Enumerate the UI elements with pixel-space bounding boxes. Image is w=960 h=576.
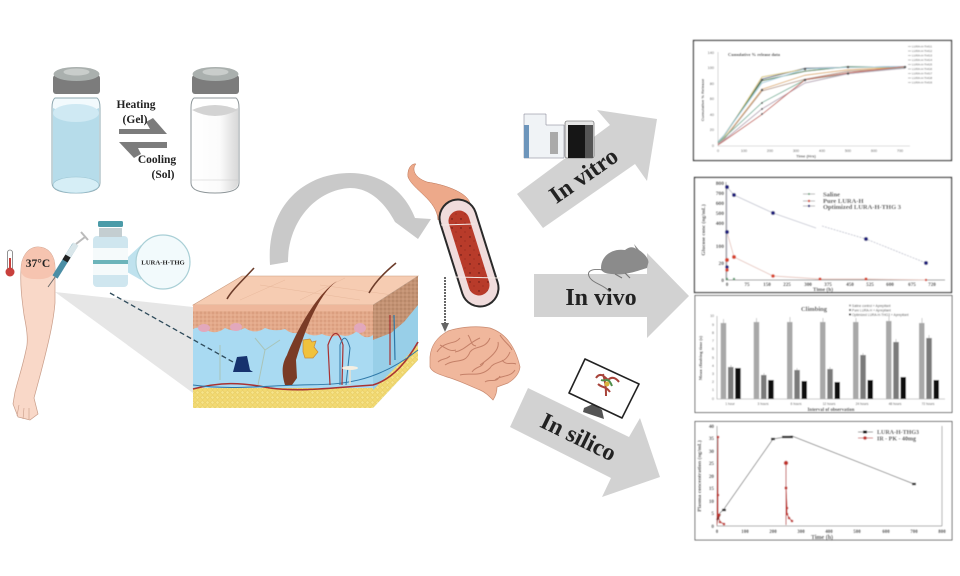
chart 3 legend: [849, 304, 909, 317]
icon: syringe: [48, 232, 88, 287]
chart 1 axes: 40: [710, 113, 714, 117]
icon: mouse: [589, 244, 648, 292]
chart 3 legend: Optimized LURA-H-THG3 + Aprepitant: [852, 313, 909, 317]
chart 1 axes: 500: [845, 149, 851, 153]
chart 3 axes: Interval of observation: [808, 408, 855, 413]
chart 1 series: [718, 66, 906, 145]
heating and cooling labels: (Gel): [123, 114, 148, 126]
heating and cooling labels: (Sol): [152, 169, 175, 181]
dashed injection line: [110, 293, 233, 362]
chart 4 axes: 30: [709, 449, 714, 455]
blue sol vial: [52, 67, 100, 193]
chart 1 legend: LURA-H-THG7: [912, 72, 932, 76]
panel: plasma concentration line chart: [695, 422, 952, 541]
panel: climbing bar chart: [695, 296, 952, 413]
chart 4 legend: IR - PK - 40mg: [877, 436, 916, 442]
sebaceous gland: [303, 339, 318, 358]
chart 2 axes: Glucose conc (ng/mL): [700, 204, 707, 256]
chart 1 legend: [908, 44, 932, 84]
chart 2 axes: 75: [744, 282, 750, 288]
chart 2 axes: 400: [716, 221, 724, 227]
chart 4 axes: 600: [882, 530, 890, 535]
icon: lab instrument: [524, 114, 594, 158]
icon: computer monitor with protein: [569, 359, 639, 419]
label: in vitro: In vitro: [545, 143, 623, 209]
chart 4 axes: 400: [825, 530, 833, 535]
chart 3 axes: 3: [712, 372, 714, 376]
skin cross-section block: [193, 263, 418, 408]
chart 1 legend: LURA-H-THG8: [912, 76, 932, 80]
chart 2 axes: 600: [886, 282, 894, 288]
chart 3 axes: 6: [712, 347, 714, 351]
chart 2 axes: 0: [721, 278, 724, 284]
chart 3 axes: 3 hours: [758, 402, 769, 406]
chart 2 axes: 20: [718, 261, 724, 267]
chart 2 axes: 100: [716, 244, 724, 250]
chart 2 series: [725, 185, 928, 281]
chart 2 axes: 375: [824, 282, 832, 288]
chart 1 axes: 0: [712, 144, 714, 148]
chart 3 axes: 72 hours: [922, 402, 935, 406]
blood vessel: [408, 164, 500, 288]
chart 1 axes: 100: [708, 66, 714, 70]
curved arrow skin to blood: [270, 173, 431, 265]
chart 4 axes: Plasma concentration (ng/mL): [696, 440, 703, 512]
chart 2 axes: [700, 181, 945, 293]
chart 3 axes: 2: [712, 380, 714, 384]
chart 1 axes: 200: [767, 149, 773, 153]
chart 1 axes: 60: [710, 97, 714, 101]
chart 4 axes: 700: [910, 530, 918, 535]
chart 4 axes: 25: [709, 461, 714, 467]
chart 4 axes: 0: [711, 524, 714, 530]
chart 2 axes: 225: [783, 282, 791, 288]
chart 4 axes: 40: [709, 424, 714, 430]
chart 3 axes: 6 hours: [790, 402, 802, 406]
chart 3 axes: 48 hours: [889, 402, 902, 406]
chart 1 title: Cumulative % release data: [728, 52, 781, 57]
chart 1 axes: 300: [793, 149, 799, 153]
white gel vial: [191, 67, 239, 193]
chart 1 legend: LURA-H-THG2: [912, 49, 932, 53]
chart 2 axes: 525: [866, 282, 874, 288]
dotted arrow to brain: [441, 277, 449, 332]
chart 1 axes: Time (Hrs): [796, 154, 817, 158]
arrow: in vivo: [534, 253, 689, 338]
chart 4 legend: LURA-H-THG3: [877, 430, 919, 436]
label: in vivo: In vivo: [565, 285, 637, 311]
chart 4 axes: 5: [711, 511, 714, 517]
chart 3 axes: 8: [712, 331, 714, 335]
chart 3 axes: [698, 314, 945, 413]
chart 4 axes: 10: [709, 499, 714, 505]
heating and cooling labels: Heating: [117, 99, 156, 111]
icon: thermometer: [6, 250, 14, 276]
label: in silico: In silico: [536, 408, 620, 467]
red vessel network: [193, 342, 418, 390]
chart 3 axes: 12 hours: [823, 402, 836, 406]
chart 1 legend: LURA-H-THG3: [912, 54, 932, 58]
chart 3 axes: 9: [712, 323, 714, 327]
heating and cooling labels: Cooling: [138, 154, 176, 166]
chart 4 axes: Time (h): [811, 534, 833, 541]
heating and cooling labels: [117, 99, 176, 181]
panel: cumulative release line chart: [694, 40, 952, 160]
zoom cone: [55, 292, 193, 393]
chart 1 axes: 100: [741, 149, 747, 153]
chart 2 legend: Saline: [823, 192, 840, 198]
hair follicle: [283, 281, 337, 385]
equilibrium arrows: [119, 118, 167, 158]
chart 2 axes: 720: [928, 282, 936, 288]
chart 1 axes: 600: [871, 149, 877, 153]
chart 1 legend: LURA-H-THG6: [912, 67, 932, 71]
chart 4 axes: 200: [769, 530, 777, 535]
chart 1 axes: Cumulative % Release: [700, 78, 705, 121]
chart 4 axes: 15: [709, 486, 714, 492]
chart 1 axes: 140: [708, 51, 714, 55]
arrow: in silico: [510, 388, 660, 497]
chart 4 legend: [858, 430, 919, 442]
chart 1 axes: 20: [710, 128, 714, 132]
chart 3 axes: 0: [712, 397, 714, 401]
chart 2 legend: [803, 192, 902, 211]
chart 1 axes: 700: [897, 149, 903, 153]
chart 1 legend: LURA-H-THG9: [912, 80, 932, 84]
chart 3 axes: 1 hour: [725, 402, 736, 406]
chart 2 legend: Pure LURA-H: [823, 198, 864, 205]
chart 1 legend: LURA-H-THG1: [912, 44, 932, 48]
chart 1 legend: LURA-H-THG5: [912, 62, 932, 66]
drug vial with callout: [93, 221, 190, 289]
chart 4 axes: 20: [709, 474, 714, 480]
chart 3 axes: 10: [710, 314, 714, 318]
brain: [430, 327, 520, 400]
chart 2 axes: 675: [908, 282, 916, 288]
chart 4 axes: 35: [709, 436, 714, 442]
chart 2 axes: 0: [726, 282, 729, 288]
chart 3 axes: 5: [712, 356, 714, 360]
chart 4 series: [717, 436, 916, 525]
chart 1 axes: 400: [819, 149, 825, 153]
chart 4 axes: 0: [716, 530, 719, 535]
panel: glucose concentration line chart: [694, 178, 952, 293]
chart 2 legend: Optimized LURA-H-THG 3: [823, 204, 902, 211]
drug vial with callout: LURA-H-THG: [141, 260, 186, 266]
chart 2 axes: Time (h): [813, 286, 833, 293]
chart 2 axes: 300: [804, 282, 812, 288]
chart 4 axes: 800: [938, 530, 946, 535]
chart 3 title: Climbing: [801, 306, 828, 313]
arrow: in vitro: [517, 110, 657, 228]
chart 2 axes: 700: [716, 191, 724, 197]
chart 2 axes: 500: [716, 211, 724, 217]
chart 2 axes: 800: [716, 181, 724, 187]
chart 4 axes: 500: [853, 530, 861, 535]
chart 4 axes: [696, 424, 946, 541]
chart 3 axes: Mean climbing time (s): [698, 335, 703, 380]
chart 1 axes: 80: [710, 82, 714, 86]
chart 3 axes: 7: [712, 339, 714, 343]
chart 3 axes: 1: [712, 388, 714, 392]
chart 3 legend: Pure LURA-H + Aprepitant: [852, 308, 891, 312]
chart 4 axes: 300: [797, 530, 805, 535]
chart 3 axes: 4: [712, 364, 714, 368]
chart 3 bars: [721, 316, 939, 399]
chart 1 legend: LURA-H-THG4: [912, 58, 932, 62]
chart 4 axes: 100: [741, 530, 749, 535]
chart 3 legend: Saline control + Aprepitant: [852, 304, 891, 308]
chart 1 axes: 0: [717, 149, 719, 153]
gel depot: [233, 356, 253, 372]
arm: [13, 247, 55, 420]
chart 3 axes: 24 hours: [856, 402, 869, 406]
chart 1 axes: [700, 51, 910, 158]
chart 2 axes: 150: [763, 282, 771, 288]
temperature label: 37°C: [26, 258, 50, 270]
chart 2 axes: 450: [846, 282, 854, 288]
chart 2 axes: 600: [716, 201, 724, 207]
